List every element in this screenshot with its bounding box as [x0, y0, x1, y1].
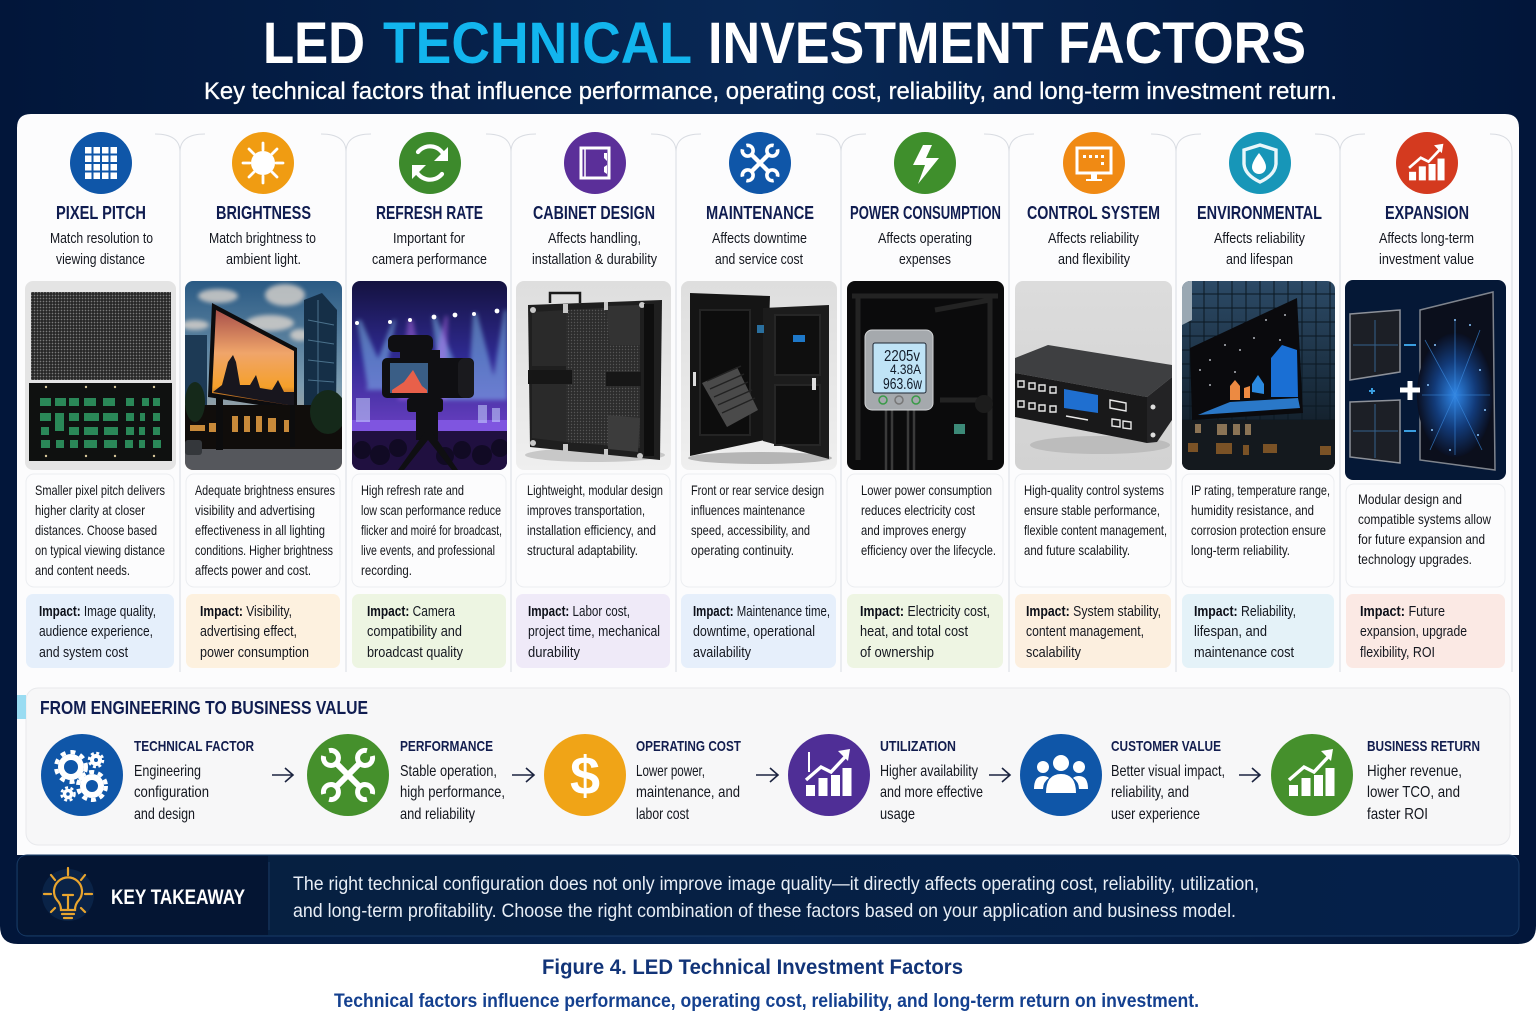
- photo: camera filming a concert: [352, 281, 509, 470]
- description: compatible systems allow: [1358, 512, 1491, 527]
- description: for future expansion and: [1358, 532, 1485, 547]
- column separators: [155, 134, 1512, 672]
- description: distances. Choose based: [35, 523, 157, 538]
- arrow: [272, 768, 293, 782]
- heading: REFRESH RATE: [376, 203, 483, 223]
- impact box: advertising effect,: [200, 623, 297, 640]
- step: business return: faster ROI: [1367, 806, 1428, 823]
- description: ensure stable performance,: [1024, 503, 1160, 518]
- impact box: scalability: [1026, 644, 1081, 661]
- impact box: Impact: System stability,: [1026, 603, 1161, 620]
- heading: CONTROL SYSTEM: [1027, 203, 1160, 223]
- photo: opened cabinet: [681, 281, 837, 470]
- description: [1191, 483, 1330, 558]
- step: customer value: CUSTOMER VALUE: [1111, 739, 1221, 755]
- description: on typical viewing distance: [35, 543, 165, 558]
- photo: power meter on cabinet: 4.38A: [890, 361, 922, 377]
- summary: [1379, 231, 1474, 268]
- impact box: [1346, 594, 1505, 668]
- column: pixel pitch: [25, 132, 176, 668]
- icon: lightning bolt: [894, 132, 956, 194]
- panel: key takeaway: [17, 855, 1519, 936]
- description: and improves energy: [861, 523, 966, 538]
- description: recording.: [361, 563, 412, 578]
- icon: monitor: [1063, 132, 1125, 194]
- step: utilization: UTILIZATION: [880, 739, 956, 755]
- section heading: FROM ENGINEERING TO BUSINESS VALUE: [40, 697, 368, 718]
- step: technical factor: TECHNICAL FACTOR: [134, 739, 254, 755]
- figure caption: Figure 4. LED Technical Investment Factors: [542, 955, 963, 979]
- icon: shield with drop: [1229, 132, 1291, 194]
- column: environmental: [1182, 132, 1335, 668]
- column: refresh rate: [352, 132, 509, 668]
- step: business return: lower TCO, and: [1367, 784, 1460, 801]
- step: performance: Stable operation,: [400, 763, 497, 780]
- impact box: maintenance cost: [1194, 644, 1295, 661]
- takeaway text: The right technical configuration does not only improve image quality—it directly affects operating cost, reliability, utilization,: [293, 873, 1259, 895]
- description: influences maintenance: [691, 503, 805, 518]
- impact box: broadcast quality: [367, 644, 463, 661]
- impact box: and system cost: [39, 644, 129, 661]
- description: live events, and professional: [361, 543, 495, 558]
- description: improves transportation,: [527, 503, 645, 518]
- description: High-quality control systems: [1024, 483, 1164, 498]
- takeaway text: and long-term profitability. Choose the right combination of these factors based on your application and business model.: [293, 900, 1236, 922]
- summary: [532, 231, 658, 268]
- photo: modular cabinets combined: [1345, 280, 1506, 480]
- icon: refresh arrows: [399, 132, 461, 194]
- summary: [209, 231, 316, 268]
- heading: ENVIRONMENTAL: [1197, 203, 1322, 223]
- description: Modular design and: [1358, 492, 1462, 507]
- description: IP rating, temperature range,: [1191, 483, 1330, 498]
- photo: LED module front and back: [25, 281, 176, 470]
- summary: [1048, 231, 1140, 268]
- heading: EXPANSION: [1385, 203, 1469, 223]
- heading: PIXEL PITCH: [56, 203, 146, 223]
- summary: [50, 231, 153, 268]
- panel: from engineering to business value: [17, 688, 1510, 845]
- summary: [1214, 231, 1306, 268]
- impact box: Impact: Visibility,: [200, 603, 292, 620]
- icon: growth chart: [1396, 132, 1458, 194]
- description: conditions. Higher brightness: [195, 543, 333, 558]
- column: power consumption: [847, 132, 1004, 668]
- impact box: [516, 594, 670, 668]
- photo: power meter on cabinet: 2205v: [884, 348, 920, 365]
- impact box: project time, mechanical: [528, 623, 660, 640]
- summary: Affects operating: [878, 231, 972, 247]
- step: customer value: user experience: [1111, 806, 1200, 823]
- step: utilization: usage: [880, 806, 915, 823]
- main white panel: [17, 114, 1519, 855]
- description: and future scalability.: [1024, 543, 1130, 558]
- description: structural adaptability.: [527, 543, 638, 558]
- arrow: [989, 768, 1010, 782]
- description: Lightweight, modular design: [527, 483, 663, 498]
- impact box: Impact: Camera: [367, 603, 456, 620]
- step: performance: [307, 734, 505, 823]
- description: efficiency over the lifecycle.: [861, 543, 996, 558]
- summary: expenses: [899, 252, 951, 268]
- step: technical factor: Engineering: [134, 763, 201, 780]
- impact box: [186, 594, 340, 668]
- description: speed, accessibility, and: [691, 523, 810, 538]
- step: operating cost: labor cost: [636, 806, 690, 823]
- column: cabinet design: [516, 132, 671, 668]
- description: [361, 483, 502, 578]
- description: flicker and moiré for broadcast,: [361, 523, 502, 538]
- title: TECHNICAL: [383, 11, 692, 76]
- takeaway text: [293, 873, 1259, 922]
- icon: sun: [232, 132, 294, 194]
- photo: controller hardware: [1015, 281, 1172, 470]
- impact box: Impact: Image quality,: [39, 603, 156, 620]
- step: performance: and reliability: [400, 806, 475, 823]
- summary: [712, 231, 807, 268]
- step: customer value: Better visual impact,: [1111, 763, 1225, 780]
- description: humidity resistance, and: [1191, 503, 1314, 518]
- summary: ambient light.: [226, 252, 301, 268]
- step: utilization: and more effective: [880, 784, 983, 801]
- summary: Affects downtime: [712, 231, 807, 247]
- icon: crossed wrenches: [729, 132, 791, 194]
- description box outlines: [26, 474, 1505, 587]
- column: expansion: [1345, 132, 1506, 668]
- impact box: power consumption: [200, 644, 309, 661]
- summary: and flexibility: [1058, 252, 1131, 268]
- step: utilization: [788, 734, 983, 823]
- step: technical factor: configuration: [134, 784, 209, 801]
- step: operating cost: OPERATING COST: [636, 739, 741, 755]
- step: business return: BUSINESS RETURN: [1367, 739, 1480, 755]
- description: higher clarity at closer: [35, 503, 145, 518]
- summary: investment value: [1379, 252, 1474, 268]
- summary: Match resolution to: [50, 231, 153, 247]
- impact box: downtime, operational: [693, 623, 815, 640]
- step: utilization: Higher availability: [880, 763, 978, 780]
- title: INVESTMENT FACTORS: [708, 11, 1306, 76]
- impact box: [26, 594, 174, 668]
- description: affects power and cost.: [195, 563, 311, 578]
- impact box: Impact: Labor cost,: [528, 603, 630, 620]
- summary: Important for: [393, 231, 465, 247]
- impact box: [847, 594, 1003, 668]
- heading: BRIGHTNESS: [216, 203, 311, 223]
- arrow: [512, 768, 534, 782]
- title: LED: [263, 11, 365, 76]
- impact box: audience experience,: [39, 623, 153, 640]
- description: and content needs.: [35, 563, 130, 578]
- arrow: [756, 768, 778, 782]
- step: performance: PERFORMANCE: [400, 739, 493, 755]
- impact box: Impact: Electricity cost,: [860, 603, 990, 620]
- summary: Affects handling,: [548, 231, 641, 247]
- summary: and service cost: [715, 252, 803, 268]
- step: technical factor: and design: [134, 806, 195, 823]
- description: installation efficiency, and: [527, 523, 656, 538]
- photo: power meter on cabinet: 963.6w: [883, 376, 923, 393]
- description: technology upgrades.: [1358, 552, 1472, 567]
- description: [1358, 492, 1491, 567]
- description: long-term reliability.: [1191, 543, 1290, 558]
- description: [35, 483, 165, 578]
- impact box: lifespan, and: [1194, 623, 1267, 640]
- step: operating cost: $: [570, 746, 600, 806]
- impact box: Impact: Reliability,: [1194, 603, 1296, 620]
- description: visibility and advertising: [195, 503, 315, 518]
- description: corrosion protection ensure: [1191, 523, 1326, 538]
- impact box: Impact: Future: [1360, 603, 1445, 620]
- summary: [372, 231, 487, 268]
- impact box: expansion, upgrade: [1360, 623, 1467, 640]
- impact box: [1182, 594, 1334, 668]
- summary: Affects long-term: [1379, 231, 1474, 247]
- step: operating cost: Lower power,: [636, 763, 705, 780]
- summary: [878, 231, 972, 268]
- impact box: compatibility and: [367, 623, 462, 640]
- description: [527, 483, 663, 558]
- subtitle: Key technical factors that influence performance, operating cost, reliability, and long-term investment return.: [204, 78, 1337, 105]
- step: customer value: reliability, and: [1111, 784, 1189, 801]
- icon: cabinet: [564, 132, 626, 194]
- column: brightness: [181, 132, 346, 668]
- figure subcaption: Technical factors influence performance, operating cost, reliability, and long-term return on investment.: [334, 991, 1199, 1012]
- photo: LED cabinet: [516, 281, 671, 470]
- description: [1024, 483, 1167, 558]
- heading: MAINTENANCE: [706, 203, 814, 223]
- description: [691, 483, 824, 558]
- step: operating cost: [544, 734, 741, 823]
- impact box: [352, 594, 506, 668]
- summary: Match brightness to: [209, 231, 316, 247]
- step: technical factor: [41, 734, 254, 823]
- description: [861, 483, 996, 558]
- description: [195, 483, 335, 578]
- summary: and lifespan: [1226, 252, 1293, 268]
- description: low scan performance reduce: [361, 503, 501, 518]
- icon: pixel grid: [70, 132, 132, 194]
- icon: light bulb: [42, 868, 94, 921]
- description: High refresh rate and: [361, 483, 464, 498]
- impact box: durability: [528, 644, 580, 661]
- step: operating cost: maintenance, and: [636, 784, 740, 801]
- summary: installation & durability: [532, 252, 658, 268]
- photo: power meter on cabinet: [847, 281, 1004, 470]
- summary: camera performance: [372, 252, 487, 268]
- description: Front or rear service design: [691, 483, 824, 498]
- step: performance: high performance,: [400, 784, 505, 801]
- description: reduces electricity cost: [861, 503, 975, 518]
- photo: facade LED screen: [1182, 281, 1335, 470]
- impact box: [1015, 594, 1171, 668]
- column: control system: [1015, 132, 1172, 668]
- step: business return: Higher revenue,: [1367, 763, 1462, 780]
- impact box: flexibility, ROI: [1360, 644, 1435, 661]
- description: Smaller pixel pitch delivers: [35, 483, 165, 498]
- impact box: content management,: [1026, 623, 1144, 640]
- photo: outdoor billboard at sunset: [181, 281, 346, 470]
- label: KEY TAKEAWAY: [111, 886, 245, 909]
- impact box: [681, 594, 836, 668]
- description: operating continuity.: [691, 543, 794, 558]
- impact box: heat, and total cost: [860, 623, 969, 640]
- step: customer value: [1020, 734, 1225, 823]
- heading: CABINET DESIGN: [533, 203, 655, 223]
- summary: Affects reliability: [1214, 231, 1306, 247]
- description: Adequate brightness ensures: [195, 483, 335, 498]
- column: maintenance: [681, 132, 837, 668]
- impact box: of ownership: [860, 644, 934, 661]
- summary: Affects reliability: [1048, 231, 1140, 247]
- impact box: Impact: Maintenance time,: [693, 603, 830, 620]
- arrow: [1239, 768, 1260, 782]
- impact box: availability: [693, 644, 751, 661]
- summary: viewing distance: [56, 252, 145, 268]
- description: flexible content management,: [1024, 523, 1167, 538]
- description: Lower power consumption: [861, 483, 992, 498]
- heading: POWER CONSUMPTION: [850, 203, 1001, 223]
- step: business return: [1271, 734, 1480, 823]
- description: effectiveness in all lighting: [195, 523, 325, 538]
